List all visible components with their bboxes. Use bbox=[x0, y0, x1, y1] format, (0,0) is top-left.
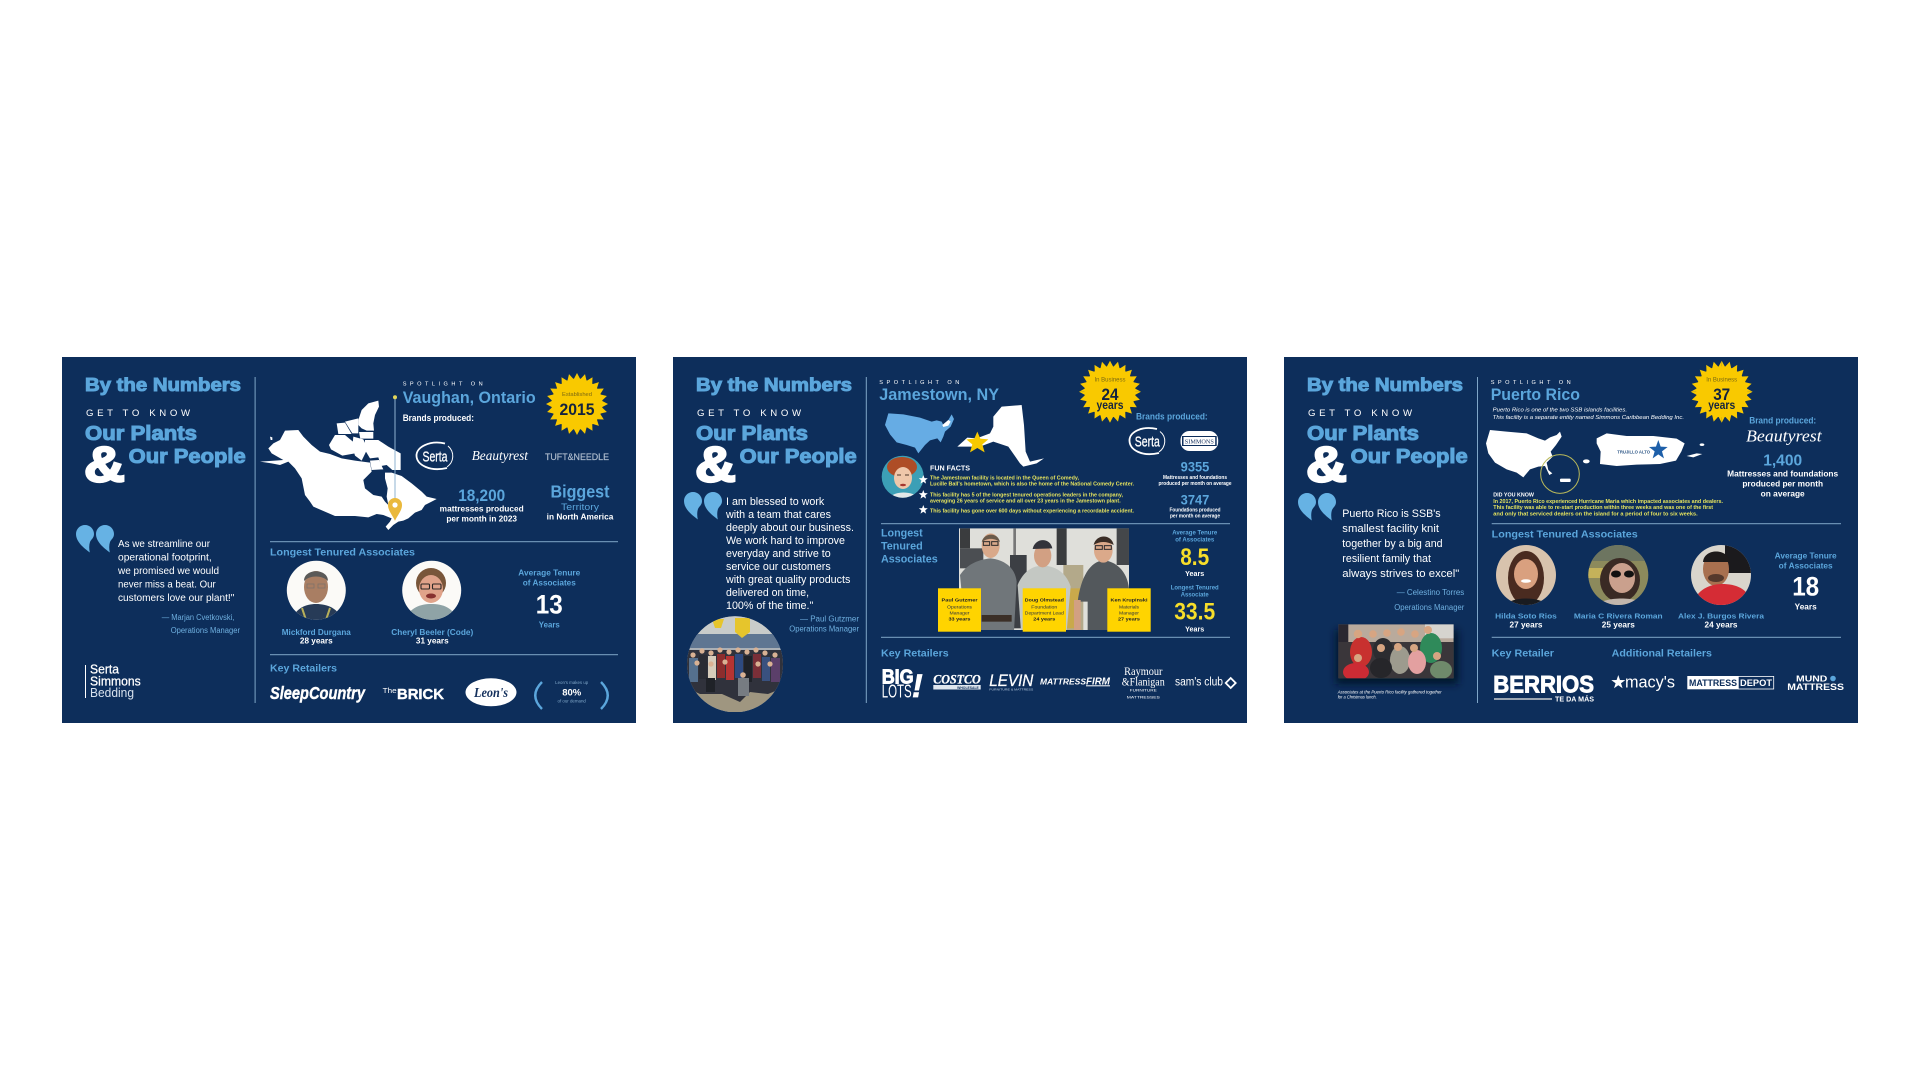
heading: longest tenured associates: Longest bbox=[881, 528, 923, 540]
quote attribution: Operations Manager bbox=[1394, 603, 1465, 612]
logo: Serta Simmons Bedding: Simmons bbox=[90, 674, 141, 688]
label: spotlight on: SPOTLIGHT ON bbox=[879, 380, 959, 386]
label box: Paul Gutzmer bbox=[938, 588, 981, 632]
heading: By the Numbers: By the Numbers bbox=[696, 374, 852, 395]
badge: in business 37 years: years bbox=[1708, 400, 1735, 412]
icon: quote marks bbox=[76, 525, 114, 552]
logo: Mattress Firm bbox=[1040, 676, 1111, 687]
name: Maria C Rivera Roman: Maria C Rivera Roman bbox=[1574, 612, 1663, 621]
logo: Mundo Mattress: MUND bbox=[1796, 674, 1827, 684]
stat: longest tenured 33.5: Years bbox=[1185, 627, 1204, 634]
heading: key retailers: Key Retailers bbox=[270, 664, 337, 675]
photo caption: Associates at the Puerto Rico facility gathered together bbox=[1337, 690, 1442, 695]
photo: Christmas lunch group bbox=[1336, 624, 1458, 684]
heading: By the Numbers: By the Numbers bbox=[85, 374, 241, 395]
text: did you know: and only that serviced dealers on the island for a period of four to six weeks. bbox=[1493, 511, 1698, 517]
photo caption: for a Christmas lunch. bbox=[1338, 694, 1377, 700]
fact list: This facility has 5 of the longest tenured operations leaders in the company, bbox=[930, 493, 1124, 499]
heading: longest tenured associates: Longest Tenured Associates bbox=[1492, 530, 1638, 541]
logo: Serta Simmons Bedding: Serta bbox=[90, 662, 119, 676]
stat: 18,200 mattresses: mattresses produced bbox=[440, 504, 524, 514]
name: Cheryl Beeler bbox=[391, 628, 474, 646]
stat: longest tenured 33.5: Longest Tenured bbox=[1171, 584, 1219, 591]
callout: Leon's share of demand: 80% bbox=[562, 688, 582, 699]
icon: quote marks bbox=[1298, 493, 1336, 520]
stat: 9355: produced per month on average bbox=[1158, 481, 1232, 487]
quote: 100% of the time." bbox=[726, 600, 813, 612]
name: Maria C Rivera Roman: 25 years bbox=[1602, 621, 1636, 630]
logo: Big Lots bbox=[882, 666, 923, 704]
heading: ampersand: & bbox=[1306, 437, 1347, 493]
heading: Our Plants: Our Plants bbox=[1307, 423, 1419, 445]
logo: Costco: WHOLESALE bbox=[957, 686, 980, 690]
fact list: Lucille Ball's hometown, which is also the home of the National Comedy Center. bbox=[930, 482, 1135, 488]
logo: Big Lots: BIG bbox=[882, 666, 914, 688]
heading: additional retailers: Additional Retailers bbox=[1612, 649, 1712, 660]
stat: average tenure 13: 13 bbox=[536, 590, 563, 620]
name: Mickford Durgana: Mickford Durgana bbox=[282, 628, 351, 637]
heading: fun facts: FUN FACTS bbox=[930, 466, 970, 473]
quote: together by a big and bbox=[1342, 538, 1443, 550]
quote: with a team that cares bbox=[725, 509, 831, 521]
fact list: This facility has gone over 600 days without experiencing a recordable accident. bbox=[930, 509, 1135, 515]
heading: ampersand: & bbox=[84, 437, 125, 493]
badge: established 2015: 2015 bbox=[560, 401, 594, 419]
logo: Mattress Depot: DEPOT bbox=[1740, 678, 1773, 688]
text: Get to know: GET TO KNOW bbox=[86, 408, 191, 419]
icon: white stars bbox=[919, 475, 928, 514]
label box: Ken Krupinski bbox=[1107, 588, 1151, 632]
quote attribution: — Marjan Cvetkovski, bbox=[162, 613, 234, 622]
text: facility intro bbox=[1493, 408, 1684, 421]
logo: Big Lots: LOTS bbox=[882, 681, 912, 701]
quote: Puerto Rico is SSB's bbox=[1342, 508, 1441, 520]
divider bbox=[866, 377, 867, 703]
portrait: Cheryl Beeler bbox=[401, 560, 463, 622]
heading: ampersand: & bbox=[695, 437, 736, 493]
logo: Beautyrest: Beautyrest bbox=[472, 449, 529, 464]
logo: Berrios: BERRIOS bbox=[1493, 672, 1594, 699]
logo: Raymour and Flanigan: Raymour bbox=[1124, 666, 1163, 678]
quote bbox=[725, 496, 854, 612]
heading: key retailers: Key Retailers bbox=[881, 649, 949, 660]
label box: Paul Gutzmer: Manager bbox=[950, 610, 970, 615]
logo: Tuft and Needle: TUFT&NEEDLE bbox=[545, 452, 609, 463]
callout: Leon's share of demand: of our demand bbox=[558, 699, 586, 704]
badge: established 2015: Established bbox=[562, 392, 592, 398]
name: Mickford Durgana: 28 years bbox=[300, 637, 333, 646]
label box: Ken Krupinski: Ken Krupinski bbox=[1110, 598, 1148, 604]
label box: Ken Krupinski: Manager bbox=[1119, 610, 1140, 615]
stat: average tenure 13: Average Tenure bbox=[518, 569, 581, 578]
photo: three longest tenured associates bbox=[959, 528, 1129, 632]
label box: Doug Olmstead bbox=[1023, 588, 1066, 632]
quote: customers love our plant!" bbox=[118, 592, 235, 604]
stat: 9355: Mattresses and foundations bbox=[1163, 475, 1227, 481]
badge: in business 24 years bbox=[1079, 361, 1141, 423]
logo: Mattress Depot: MATTRESS bbox=[1689, 678, 1737, 688]
stat: average tenure 18: 18 bbox=[1792, 572, 1819, 602]
quote: we promised we would bbox=[117, 565, 219, 577]
stat: average tenure 8.5 bbox=[1172, 530, 1218, 578]
stat: 3747: Foundations produced bbox=[1170, 507, 1220, 513]
stat: average tenure 13 bbox=[518, 569, 581, 630]
stat: 1,400: on average bbox=[1761, 489, 1805, 499]
quote: operational footprint, bbox=[118, 552, 212, 564]
stat: 1,400: 1,400 bbox=[1763, 453, 1802, 470]
logo: Simmons: SIMMONS bbox=[1185, 438, 1214, 446]
logo: Sleep Country: SleepCountry bbox=[270, 683, 366, 703]
map: New York State with star bbox=[957, 405, 1044, 467]
name: Maria C Rivera Roman bbox=[1574, 612, 1663, 630]
text: did you know: This facility was able to re-start production within three weeks and was one of the first bbox=[1493, 505, 1713, 511]
heading: longest tenured associates bbox=[881, 528, 938, 566]
stat: average tenure 18: Years bbox=[1795, 602, 1817, 611]
logo: Mattress Firm: FIRM bbox=[1086, 676, 1111, 687]
stat: 1,400: Mattresses and foundations bbox=[1727, 469, 1839, 479]
badge: in business 37 years bbox=[1691, 361, 1753, 423]
name: Cheryl Beeler: Cheryl Beeler (Code) bbox=[391, 628, 474, 637]
label box: Doug Olmstead: 24 years bbox=[1033, 617, 1056, 623]
label box: Paul Gutzmer: Operations bbox=[947, 605, 973, 610]
heading: By the Numbers: By the Numbers bbox=[1307, 374, 1463, 395]
logo: Mattress Depot bbox=[1687, 676, 1774, 689]
quote: never miss a beat. Our bbox=[118, 578, 216, 590]
quote: smallest facility knit bbox=[1342, 523, 1440, 535]
stat: 9355: 9355 bbox=[1181, 460, 1210, 475]
fact list bbox=[930, 476, 1135, 515]
logo: Raymour and Flanigan bbox=[1122, 666, 1165, 700]
stat: 18,200 mattresses: per month in 2023 bbox=[446, 514, 517, 524]
heading: longest tenured associates: Longest Tenured Associates bbox=[270, 548, 415, 559]
logo: Berrios: TE DA MÁS bbox=[1555, 694, 1594, 704]
stat: biggest territory bbox=[547, 481, 614, 522]
text: brands produced: Brands produced: bbox=[403, 413, 474, 423]
logo: The Brick: The bbox=[383, 686, 397, 695]
photo caption bbox=[1337, 690, 1442, 700]
logo: Sam's Club: sam's club bbox=[1175, 677, 1223, 689]
map: Puerto Rico with Trujillo Alto star bbox=[1597, 433, 1704, 466]
callout: Leon's share of demand: Leon's makes up bbox=[555, 680, 589, 685]
quote: always strives to excel" bbox=[1342, 568, 1459, 580]
text: brands produced: Brands produced: bbox=[1136, 412, 1208, 422]
heading: Our Plants: Our Plants bbox=[85, 423, 197, 445]
stat: average tenure 13: of Associates bbox=[523, 579, 576, 588]
quote: resilient family that bbox=[1342, 553, 1432, 565]
text: facility intro: This facility is a separate entity named Simmons Caribbean Bedding Inc. bbox=[1493, 415, 1684, 421]
text: Get to know: GET TO KNOW bbox=[697, 408, 802, 419]
logo: Mundo Mattress: MATTRESS bbox=[1787, 682, 1844, 692]
label box: Doug Olmstead: Doug Olmstead bbox=[1025, 598, 1064, 604]
stat: average tenure 18: Average Tenure bbox=[1775, 551, 1837, 560]
logo: Raymour and Flanigan: MATTRESSES bbox=[1127, 696, 1161, 700]
quote: deeply about our business. bbox=[726, 522, 854, 534]
stat: average tenure 8.5: Years bbox=[1185, 571, 1204, 578]
stat: longest tenured 33.5: 33.5 bbox=[1174, 598, 1215, 625]
logo: Raymour and Flanigan: FURNITURE bbox=[1130, 688, 1158, 692]
logo: Leon's: Leon's bbox=[473, 686, 508, 701]
heading: key retailer: Key Retailer bbox=[1492, 649, 1554, 660]
badge: in business 37 years: In Business bbox=[1706, 378, 1737, 384]
stat: average tenure 18 bbox=[1775, 551, 1837, 611]
map: Puerto Rico with Trujillo Alto star: TRUJILLO ALTO bbox=[1617, 450, 1650, 455]
quote: everyday and strive to bbox=[726, 548, 831, 560]
quote: service our customers bbox=[726, 561, 831, 573]
stat: average tenure 8.5: 8.5 bbox=[1180, 544, 1209, 571]
logo: Mattress Firm: MATTRESS bbox=[1040, 676, 1086, 686]
icon: quote marks bbox=[684, 492, 722, 520]
quote: As we streamline our bbox=[118, 538, 210, 550]
portrait: Lucille Ball bbox=[882, 456, 924, 498]
heading: Puerto Rico: Puerto Rico bbox=[1491, 385, 1580, 404]
quote bbox=[117, 538, 235, 604]
text: Get to know: GET TO KNOW bbox=[1308, 408, 1413, 419]
stat: 1,400: produced per month bbox=[1742, 479, 1823, 489]
heading: longest tenured associates: Associates bbox=[881, 554, 938, 566]
stat: 1,400 bbox=[1727, 453, 1839, 499]
logo: Mundo Mattress bbox=[1787, 674, 1844, 692]
logo: Serta: Serta bbox=[1135, 434, 1160, 450]
heading: Our People: Our People bbox=[740, 446, 857, 468]
stat: 18,200 mattresses bbox=[440, 486, 524, 524]
logo: The Brick: BRICK bbox=[397, 686, 444, 703]
logo: Levin: FURNITURE & MATTRESS bbox=[989, 688, 1033, 692]
fact list: averaging 26 years of service and all over 23 years in the Jamestown plant. bbox=[930, 498, 1121, 504]
text: brand produced: Brand produced: bbox=[1749, 416, 1816, 426]
map: United States bbox=[885, 413, 954, 453]
logo: Serta: Serta bbox=[422, 448, 448, 466]
logo: Serta Simmons Bedding: Bedding bbox=[90, 686, 134, 700]
heading: Jamestown, NY: Jamestown, NY bbox=[879, 385, 1000, 404]
name: Hilda Soto Rios: Hilda Soto Rios bbox=[1495, 612, 1557, 621]
logo: Serta bbox=[1129, 428, 1165, 454]
badge: in business 24 years: In Business bbox=[1094, 378, 1126, 384]
fact list: The Jamestown facility is located in the Queen of Comedy, bbox=[930, 476, 1080, 482]
quote attribution: — Paul Gutzmer bbox=[800, 615, 859, 624]
name: Hilda Soto Rios bbox=[1495, 612, 1557, 630]
callout: Leon's share of demand bbox=[535, 680, 608, 709]
stat: 18,200 mattresses: 18,200 bbox=[458, 486, 505, 505]
badge: established 2015 bbox=[546, 373, 608, 435]
label box: Paul Gutzmer: Paul Gutzmer bbox=[942, 598, 978, 604]
logo: Costco: COSTCO bbox=[933, 672, 981, 686]
stat: 3747 bbox=[1170, 492, 1220, 520]
label: spotlight on: SPOTLIGHT ON bbox=[1491, 380, 1571, 386]
logo: Raymour and Flanigan: &Flanigan bbox=[1122, 677, 1165, 689]
divider bbox=[1477, 377, 1478, 703]
panel: Jamestown, NY bbox=[673, 357, 1247, 723]
quote attribution: Operations Manager bbox=[789, 625, 859, 634]
heading: Our People: Our People bbox=[1351, 446, 1468, 468]
heading: Vaughan, Ontario: Vaughan, Ontario bbox=[403, 388, 536, 407]
stat: average tenure 18: of Associates bbox=[1779, 561, 1833, 570]
logo: Serta Simmons Bedding bbox=[85, 662, 141, 700]
quote attribution bbox=[162, 613, 240, 635]
stat: biggest territory: in North America bbox=[547, 513, 614, 522]
name: Alex J. Burgos Rivera: 24 years bbox=[1704, 621, 1738, 630]
badge: in business 24 years: years bbox=[1096, 400, 1124, 412]
quote: with great quality products bbox=[725, 574, 851, 586]
quote: delivered on time, bbox=[726, 587, 809, 599]
panel: Puerto Rico bbox=[1284, 357, 1858, 723]
name: Mickford Durgana bbox=[282, 628, 351, 646]
heading: Our People: Our People bbox=[129, 446, 246, 468]
label box: Ken Krupinski: 27 years bbox=[1118, 617, 1140, 623]
text: did you know: DID YOU KNOW bbox=[1493, 492, 1535, 498]
stat: 3747: per month on average bbox=[1170, 514, 1220, 520]
quote: We work hard to improve bbox=[726, 535, 845, 547]
fun facts bbox=[919, 466, 1135, 515]
map: Canada bbox=[260, 401, 437, 530]
stat: biggest territory: Territory bbox=[561, 502, 600, 512]
stat: average tenure 8.5: of Associates bbox=[1175, 537, 1215, 544]
label: spotlight on: SPOTLIGHT ON bbox=[403, 382, 483, 388]
logo: Simmons bbox=[1180, 431, 1218, 451]
label box: Doug Olmstead: Department Lead bbox=[1025, 610, 1064, 615]
label box: Paul Gutzmer: 33 years bbox=[948, 617, 971, 623]
portrait: Mickford Durgana bbox=[286, 560, 346, 622]
logo: Macy's: macy's bbox=[1625, 673, 1675, 692]
name: Alex J. Burgos Rivera: Alex J. Burgos Rivera bbox=[1678, 612, 1765, 621]
portrait: Hilda Soto Rios bbox=[1496, 545, 1556, 606]
heading: Our Plants: Our Plants bbox=[696, 423, 808, 445]
stat: biggest territory: Biggest bbox=[550, 481, 610, 501]
stat: longest tenured 33.5: Associate bbox=[1181, 591, 1209, 598]
quote attribution: — Celestino Torres bbox=[1397, 588, 1464, 597]
name: Alex J. Burgos Rivera bbox=[1678, 612, 1765, 630]
logo: Serta bbox=[416, 443, 453, 469]
divider bbox=[255, 377, 256, 703]
portrait: Alex J. Burgos Rivera bbox=[1691, 545, 1752, 606]
name: Cheryl Beeler: 31 years bbox=[416, 637, 449, 646]
portrait: Maria C Rivera Roman bbox=[1588, 545, 1649, 606]
quote attribution: Operations Manager bbox=[171, 626, 240, 635]
quote bbox=[1342, 508, 1459, 580]
text: did you know bbox=[1493, 492, 1724, 517]
logo: Big Lots: ! bbox=[912, 668, 923, 704]
map: United States with locator circle bbox=[1486, 430, 1590, 493]
badge: in business 37 years: 37 bbox=[1713, 385, 1730, 404]
logo: Levin: LEVIN bbox=[989, 671, 1034, 690]
stat: longest tenured 33.5 bbox=[1171, 584, 1219, 634]
logo: Leon's bbox=[466, 678, 516, 706]
stat: 9355 bbox=[1158, 460, 1232, 487]
text: did you know: In 2017, Puerto Rico experienced Hurricane Maria which impacted associates and dealers. bbox=[1493, 499, 1724, 505]
photo: plant team group bbox=[687, 616, 783, 712]
heading: longest tenured associates: Tenured bbox=[881, 541, 923, 553]
label box: Ken Krupinski: Materials bbox=[1119, 605, 1140, 610]
text: facility intro: Puerto Rico is one of the two SSB islands facilities. bbox=[1493, 408, 1627, 414]
stat: 3747: 3747 bbox=[1181, 492, 1209, 507]
quote: I am blessed to work bbox=[726, 496, 825, 508]
location marker: Vaughan bbox=[388, 395, 402, 521]
quote attribution bbox=[1394, 588, 1465, 612]
stat: average tenure 8.5: Average Tenure bbox=[1172, 530, 1218, 537]
label box: Doug Olmstead: Foundation bbox=[1031, 605, 1058, 610]
panel: Vaughan, Ontario bbox=[62, 357, 636, 723]
stat: average tenure 13: Years bbox=[539, 621, 560, 630]
quote attribution bbox=[789, 615, 859, 634]
logo: Beautyrest: Beautyrest bbox=[1746, 427, 1823, 446]
name: Hilda Soto Rios: 27 years bbox=[1510, 621, 1543, 630]
badge: in business 24 years: 24 bbox=[1102, 385, 1119, 404]
